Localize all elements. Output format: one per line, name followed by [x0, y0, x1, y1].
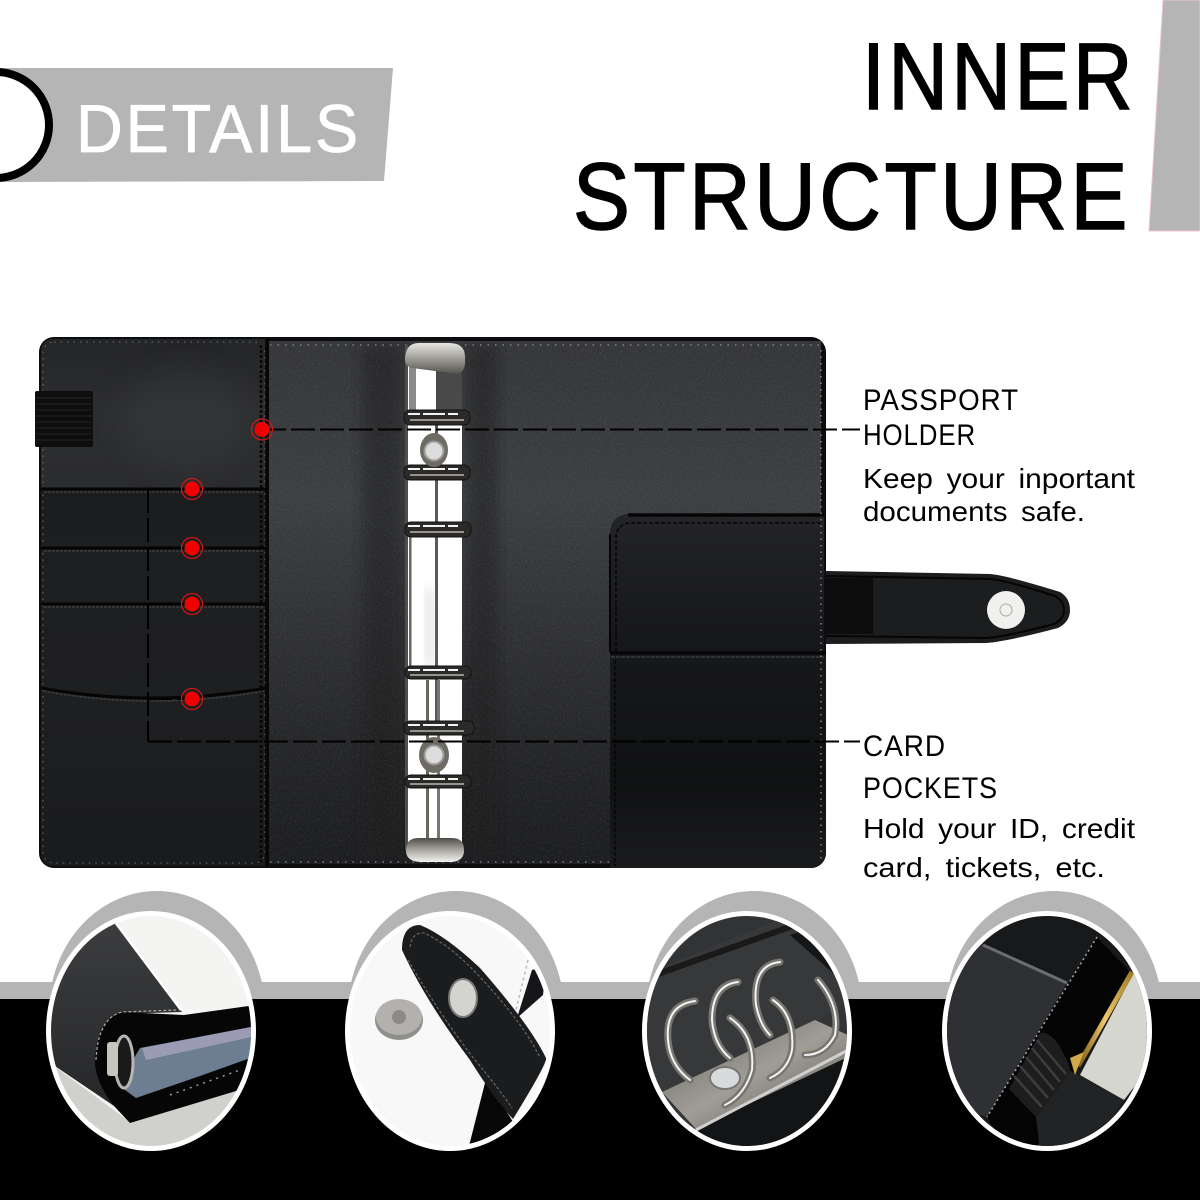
binder cover base — [39, 337, 826, 868]
callout text: passport holder — [863, 384, 1135, 527]
bottom band — [0, 982, 1200, 1200]
rings — [404, 410, 474, 788]
centre lining — [269, 341, 822, 864]
callout text: card pockets: POCKETS — [863, 772, 998, 805]
callout text: passport holder: documents safe. — [863, 496, 1085, 527]
corner accent block — [1149, 0, 1200, 231]
rivets — [420, 433, 448, 467]
callout text: passport holder: HOLDER — [863, 419, 976, 452]
callout text: card pockets: CARD — [863, 730, 946, 763]
title: inner structure: INNER — [862, 24, 1136, 130]
detail circle: binder edge — [46, 911, 256, 1151]
elastic pen loop — [35, 391, 93, 447]
title: inner structure: STRUCTURE — [573, 144, 1131, 250]
detail circle: magnetic snap — [345, 911, 555, 1151]
left card panel — [41, 339, 267, 866]
details banner — [0, 68, 393, 182]
callout text: card pockets: Hold your ID, credit — [863, 813, 1135, 844]
arc accents behind detail circles — [52, 891, 1159, 982]
callout text: card pockets: card, tickets, etc. — [863, 852, 1105, 883]
callout markers — [182, 419, 272, 710]
callout text: passport holder: PASSPORT — [863, 384, 1019, 417]
strap with magnetic snap — [826, 571, 1070, 644]
detail circle: metal rings — [642, 911, 852, 1151]
detail circle: pen loop — [942, 911, 1152, 1151]
details banner: DETAILS — [76, 91, 361, 167]
right pockets — [610, 350, 826, 868]
title: inner structure — [573, 24, 1136, 250]
callout text: passport holder: Keep your inportant — [863, 463, 1135, 494]
ring binder mechanism — [404, 343, 474, 862]
callout text: card pockets — [863, 730, 1135, 883]
callout leader lines — [148, 430, 860, 742]
binder photo — [35, 337, 1070, 868]
